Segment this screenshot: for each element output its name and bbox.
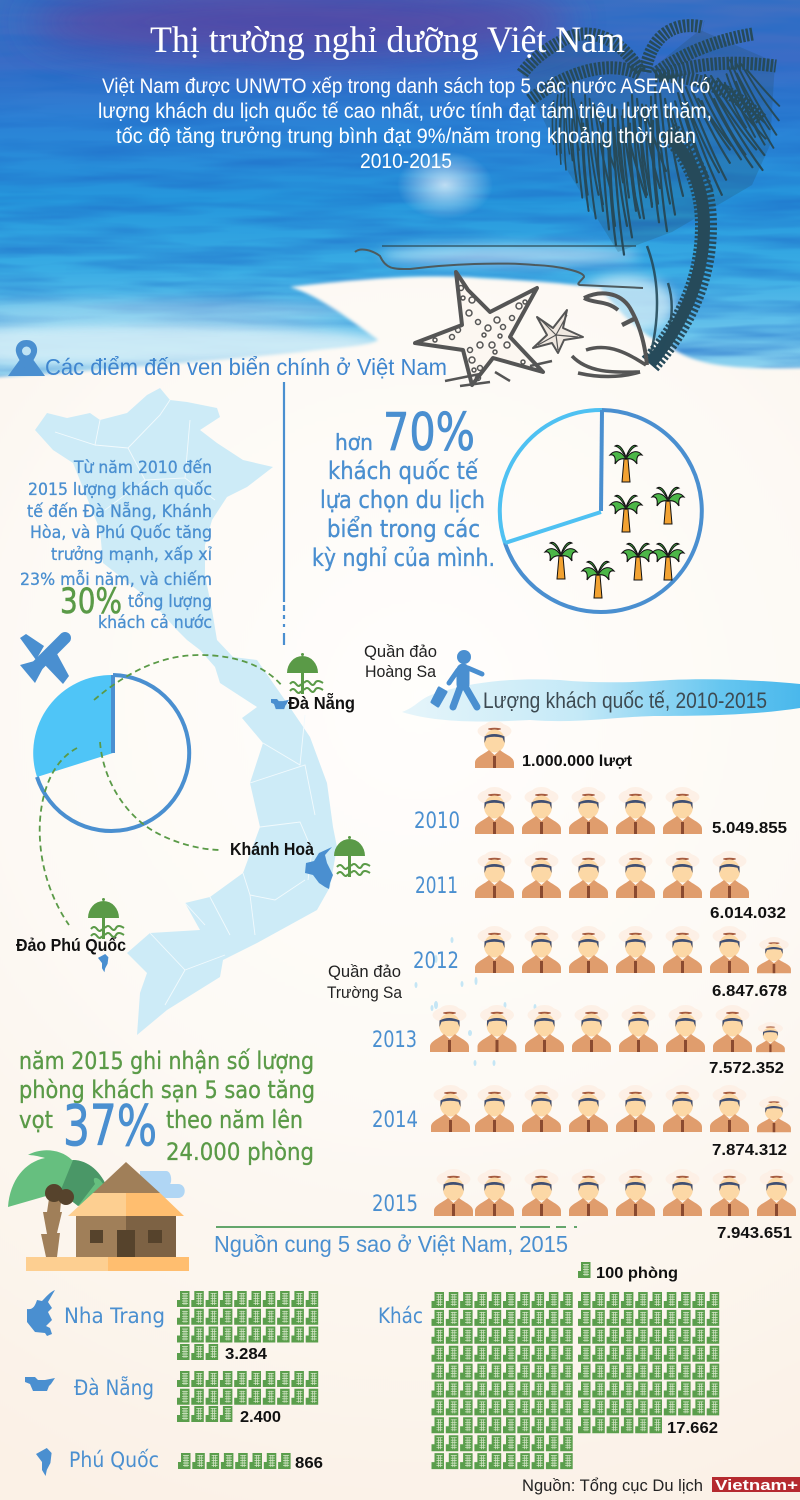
pie chart: 70% beach — [500, 410, 702, 612]
row: 2015: 7.943.651 — [717, 1225, 792, 1242]
map of Vietnam — [35, 388, 337, 1035]
group: Đà Nẵng: Đà Nẵng — [74, 1375, 154, 1400]
vertical divider — [283, 382, 285, 645]
row: 2010 — [414, 787, 787, 837]
label: Hoàng Sa — [364, 642, 437, 681]
label: Trường Sa: Quần đảo — [328, 962, 401, 981]
text block: 30% of visitors: trưởng mạnh, xấp xỉ — [51, 544, 212, 565]
row: 2011: 2011 — [415, 874, 458, 899]
row: 2015: 2015 — [372, 1192, 418, 1217]
intro paragraph: Việt Nam được UNWTO xếp trong danh sách top 5 các nước ASEAN có — [102, 75, 710, 98]
row: 2013 — [372, 1005, 785, 1077]
text block: 30% of visitors — [20, 457, 212, 633]
row: 2010: 2010 — [414, 809, 460, 834]
text block: 70% choose beach — [312, 403, 495, 572]
label: Hoàng Sa: Hoàng Sa — [365, 662, 436, 681]
group: Đà Nẵng — [25, 1371, 318, 1426]
horizon and shoreline strokes — [355, 246, 643, 288]
text block: 30% of visitors: tế đến Đà Nẵng, Khánh — [27, 501, 212, 522]
group: Phú Quốc: 866 — [295, 1455, 323, 1472]
text block: 37% five-star rooms — [19, 1047, 315, 1166]
text block: 30% of visitors: tổng lượng — [128, 591, 212, 612]
group: Phú Quốc — [36, 1448, 323, 1476]
pictogram legend: 1,000,000 visits: 1.000.000 lượt — [522, 753, 632, 770]
row: 2012: 6.847.678 — [712, 983, 787, 1000]
group: Phú Quốc: Phú Quốc — [69, 1448, 159, 1472]
text block: 70% choose beach: kỳ nghỉ của mình. — [312, 544, 495, 572]
starfish big — [415, 272, 552, 386]
row: 2013: 7.572.352 — [709, 1060, 784, 1077]
text block: 30% of visitors: 2015 lượng khách quốc — [28, 479, 212, 500]
text block: 70% choose beach: khách quốc tế — [328, 457, 478, 485]
row: 2012 — [413, 926, 791, 1000]
row: 2015 — [372, 1169, 796, 1242]
logo: Vietnam+: Vietnam+ — [715, 1477, 798, 1494]
text block: 30% of visitors: 30% — [60, 582, 122, 622]
heading: coastal destinations: Các điểm đến ven biển chính ở Việt Nam — [45, 354, 447, 380]
heading: five-star supply: Nguồn cung 5 sao ở Việt Nam, 2015 — [214, 1231, 568, 1257]
island specks — [414, 937, 536, 1066]
marker: Khánh Hoà: Khánh Hoà — [230, 839, 314, 859]
group: Nha Trang: Nha Trang — [64, 1304, 165, 1328]
green divider — [216, 1226, 577, 1228]
marker: Đảo Phú Quốc — [16, 898, 126, 972]
group: Đà Nẵng: 2.400 — [240, 1409, 281, 1426]
icon: map pin — [8, 340, 45, 376]
row: 2010: 5.049.855 — [712, 820, 787, 837]
heading band: international visitors: Lượng khách quốc tế, 2010-2015 — [483, 688, 767, 713]
title: Thị trường nghỉ dưỡng Việt Nam — [150, 20, 625, 61]
text block: 30% of visitors: Từ năm 2010 đến — [73, 457, 212, 478]
marker: Đảo Phú Quốc: Đảo Phú Quốc — [16, 935, 126, 955]
group: Nha Trang — [27, 1290, 318, 1363]
text block: 30% of visitors: khách cả nước — [98, 613, 212, 633]
pictogram legend: 1,000,000 visits — [475, 721, 632, 770]
dashed connector lines — [40, 655, 283, 925]
pie chart: 30% of visitors — [33, 675, 189, 831]
legend: 100 rooms — [578, 1262, 678, 1282]
legend: 100 rooms: 100 phòng — [596, 1265, 678, 1282]
icon: traveller with suitcase — [432, 650, 482, 707]
intro paragraph: tốc độ tăng trưởng trung bình đạt 9%/năm trong khoảng thời gian — [116, 125, 696, 148]
intro paragraph — [98, 75, 712, 173]
marker: Khánh Hoà — [230, 836, 370, 889]
row: 2013: 2013 — [372, 1028, 417, 1053]
text block: 37% five-star rooms: vọt — [19, 1106, 53, 1134]
text block: 70% choose beach: biển trong các — [327, 515, 480, 543]
label: Trường Sa: Trường Sa — [327, 983, 402, 1002]
text block: 30% of visitors: Hòa, và Phú Quốc tăng — [30, 522, 212, 543]
starfish small — [533, 310, 583, 353]
group: other destinations: Khác — [378, 1304, 423, 1328]
icon: palm trees — [545, 445, 684, 598]
text block: 37% five-star rooms: năm 2015 ghi nhận số lượng — [19, 1047, 314, 1075]
row: 2012: 2012 — [413, 949, 459, 974]
text block: 30% of visitors: 23% mỗi năm, và chiếm — [20, 569, 212, 590]
group: Nha Trang: 3.284 — [225, 1346, 267, 1363]
label: Hoàng Sa: Quần đảo — [364, 642, 437, 661]
text block: 70% choose beach: hơn — [335, 431, 373, 456]
palm tree illustration — [521, 26, 792, 364]
intro paragraph: lượng khách du lịch quốc tế cao nhất, ước tính đạt tám triệu lượt thăm, — [98, 100, 712, 123]
icon: beach house with palm — [8, 1150, 189, 1271]
marker: Đà Nẵng — [271, 653, 355, 713]
row: 2014: 2014 — [372, 1108, 418, 1133]
row: 2014 — [372, 1085, 791, 1159]
marker: Đà Nẵng: Đà Nẵng — [288, 691, 355, 713]
text block: 37% five-star rooms: 24.000 phòng — [166, 1138, 314, 1166]
group: other destinations — [378, 1292, 719, 1469]
heading band: international visitors — [402, 679, 800, 722]
row: 2011 — [415, 851, 786, 922]
text block: 37% five-star rooms: 37% — [63, 1094, 157, 1159]
text block: 70% choose beach: lựa chọn du lịch — [320, 486, 485, 514]
text block: 37% five-star rooms: theo năm lên — [166, 1106, 303, 1134]
text block: 37% five-star rooms: phòng khách sạn 5 sao tăng — [19, 1076, 315, 1104]
label: Trường Sa — [327, 962, 402, 1002]
group: other destinations: 17.662 — [667, 1420, 718, 1437]
icon: airplane — [20, 634, 69, 684]
intro paragraph: 2010-2015 — [360, 150, 452, 173]
shells — [572, 293, 647, 377]
row: 2011: 6.014.032 — [710, 905, 786, 922]
source line: Nguồn: Tổng cục Du lịch — [522, 1476, 703, 1495]
text block: 70% choose beach: 70% — [383, 403, 475, 463]
row: 2014: 7.874.312 — [712, 1142, 787, 1159]
